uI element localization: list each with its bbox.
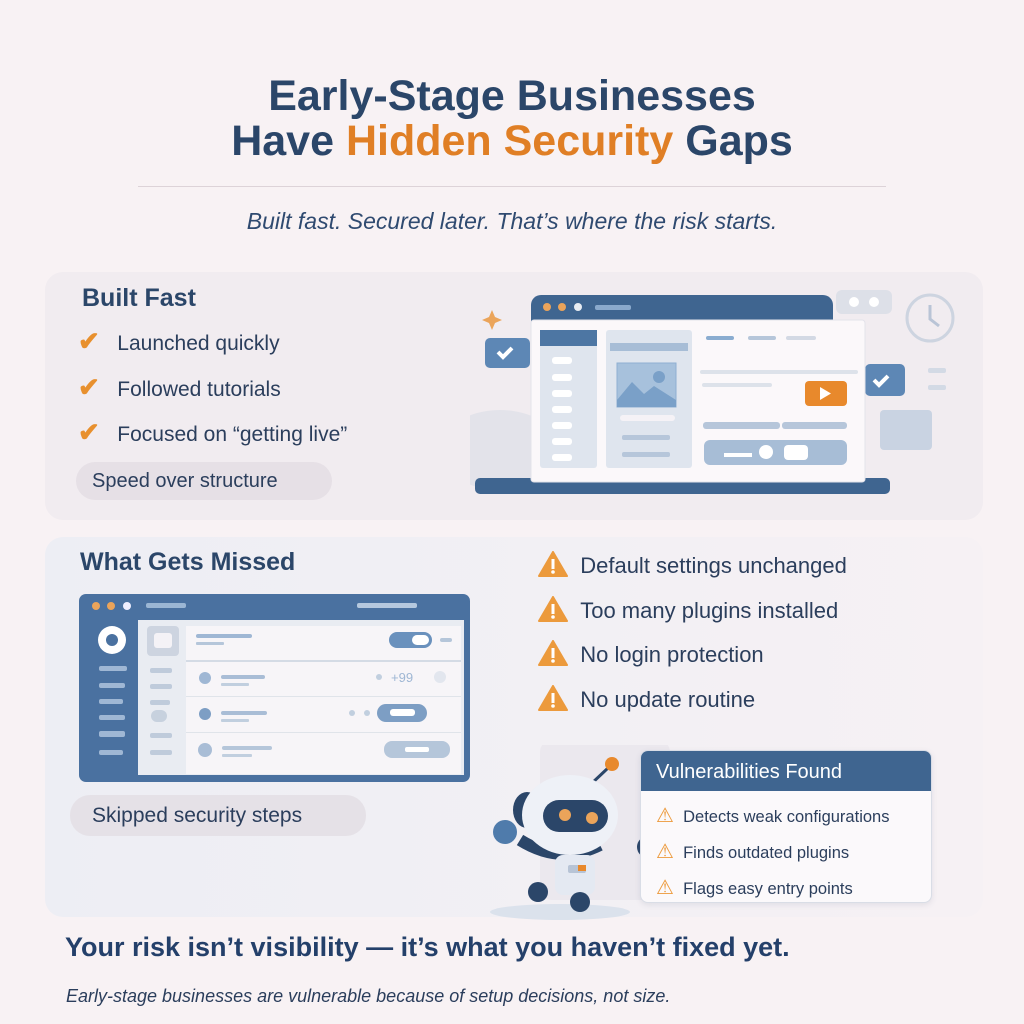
checklist: ✔ Launched quickly [78, 326, 280, 356]
warning list: No login protection [580, 642, 764, 667]
pill: skipped security steps: Skipped security steps [92, 804, 302, 827]
checklist: ✔ Focused on “getting live” [78, 417, 347, 447]
callout header: Vulnerabilities Found [656, 761, 842, 783]
checklist [78, 326, 347, 447]
panel: what gets missed [45, 537, 983, 917]
callout list: ⚠ Detects weak configurations [656, 805, 889, 827]
illustration: settings dashboard: +99 [391, 670, 413, 685]
callout: vulnerabilities found [640, 750, 932, 903]
pill: speed over structure: Speed over structure [92, 470, 278, 492]
warning list: Too many plugins installed [580, 598, 838, 622]
illustration: laptop website [470, 290, 954, 494]
illustration: settings dashboard [79, 594, 470, 782]
callout list: ⚠ Flags easy entry points [656, 877, 853, 899]
title: Early-Stage Businesses [268, 72, 756, 120]
title: Have Hidden Security Gaps [231, 117, 793, 165]
warning list [538, 551, 847, 712]
title [231, 72, 793, 165]
subtitle: Built fast. Secured later. That’s where the risk starts. [247, 208, 777, 234]
warning list: No update routine [580, 686, 755, 712]
heading: built fast: Built Fast [82, 284, 196, 312]
footnote: Early-stage businesses are vulnerable because of setup decisions, not size. [66, 986, 670, 1006]
pill: skipped security steps [70, 795, 366, 836]
callout header [641, 751, 931, 791]
pill: speed over structure [76, 462, 332, 500]
panel: built fast [45, 272, 983, 520]
callout list: ⚠ Finds outdated plugins [656, 841, 849, 863]
warning list: Default settings unchanged [580, 553, 847, 578]
heading: what gets missed: What Gets Missed [80, 548, 295, 576]
callout list [656, 805, 889, 899]
illustration: robot [490, 757, 640, 920]
checklist: ✔ Followed tutorials [78, 372, 281, 402]
conclusion headline: Your risk isn’t visibility — it’s what you haven’t fixed yet. [65, 932, 790, 962]
